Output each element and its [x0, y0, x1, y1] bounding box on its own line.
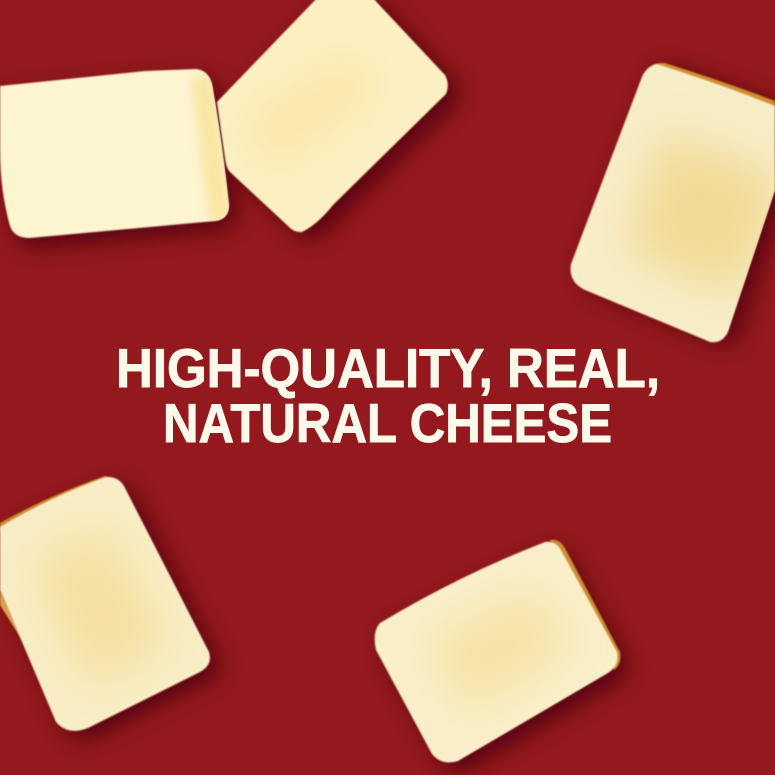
title	[116, 337, 660, 454]
cheese cube: bottom left	[0, 476, 210, 731]
cheese cube: bottom right	[375, 540, 620, 762]
title: NATURAL CHEESE	[163, 392, 612, 454]
title: HIGH-QUALITY, REAL,	[116, 337, 660, 399]
cheese cube: top left	[0, 69, 232, 238]
cheese cube: top centre	[217, 0, 448, 232]
cheese cube: top right	[571, 63, 775, 342]
